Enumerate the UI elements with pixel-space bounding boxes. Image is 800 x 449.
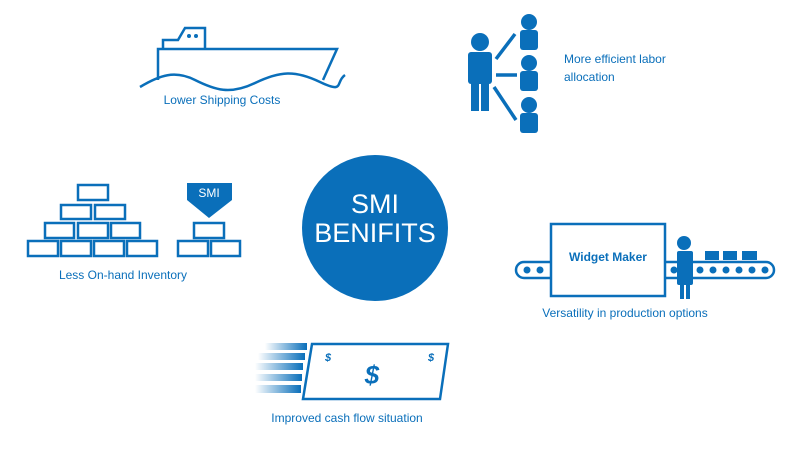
label: labor: More efficient labor — [564, 52, 666, 66]
icon: cash: $ — [364, 360, 380, 390]
label: labor: allocation — [564, 70, 615, 84]
icon: inventory — [28, 183, 240, 256]
label: shipping: Lower Shipping Costs — [164, 93, 280, 107]
center circle: BENIFITS — [314, 218, 436, 248]
label: labor — [564, 52, 666, 84]
icon: cash: $ — [427, 352, 435, 364]
icon: labor — [468, 14, 538, 133]
icon: cash: $ — [324, 352, 332, 364]
label: versatility: Versatility in production options — [542, 306, 708, 320]
label: inventory: Less On-hand Inventory — [59, 268, 187, 282]
icon: widget maker: Widget Maker — [569, 250, 647, 264]
center circle: SMI — [351, 189, 399, 219]
center circle — [302, 155, 448, 301]
icon: widget maker — [516, 224, 774, 299]
icon: cash — [255, 343, 448, 399]
icon: inventory: SMI — [198, 186, 220, 200]
icon: ship — [140, 28, 345, 90]
label: cash: Improved cash flow situation — [271, 411, 423, 425]
